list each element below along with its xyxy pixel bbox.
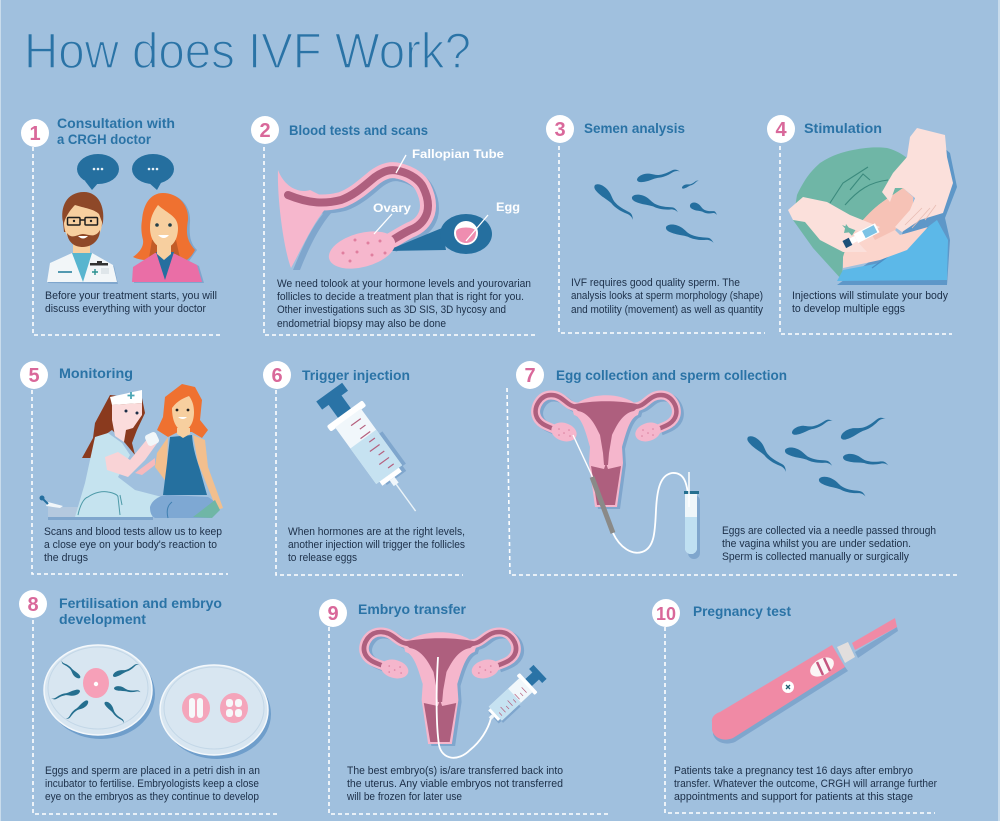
icon: hands injecting abdomen xyxy=(788,128,957,285)
icon: nurse and patient xyxy=(40,384,223,520)
text 5: a close eye on your body's reaction to xyxy=(44,539,217,551)
panel: step 9 embryo transfer xyxy=(319,599,609,814)
icon: doctor xyxy=(47,192,118,284)
heading 3: Semen analysis xyxy=(584,121,685,136)
text 6: to release eggs xyxy=(288,552,358,564)
label: ovary: Ovary xyxy=(373,201,411,215)
text 9: will be frozen for later use xyxy=(346,791,462,803)
badge 2: 2 xyxy=(259,120,271,142)
diagram: uterus with collection needle xyxy=(536,395,689,553)
heading 1: Consultation with xyxy=(57,116,175,131)
text 7: Eggs are collected via a needle passed through xyxy=(722,525,936,537)
panel: step 6 trigger injection xyxy=(263,361,466,575)
badge 10 xyxy=(652,599,680,627)
badge 6 xyxy=(263,361,291,389)
label: fallopian tube: Fallopian Tube xyxy=(412,147,504,161)
heading 9: Embryo transfer xyxy=(358,602,467,617)
panel: step 10 pregnancy test xyxy=(652,599,937,813)
panel: step 8 fertilisation xyxy=(19,590,277,814)
text 8: Eggs and sperm are placed in a petri dish in an xyxy=(45,765,260,777)
heading 10: Pregnancy test xyxy=(693,604,792,619)
badge 5 xyxy=(20,361,48,389)
heading 4: Stimulation xyxy=(804,121,882,136)
diagram: fallopian tube and ovary xyxy=(278,155,492,275)
text 4: Injections will stimulate your body xyxy=(792,290,949,302)
icon: pregnancy test stick xyxy=(712,618,898,744)
panel: step 3 semen analysis xyxy=(546,115,765,333)
icon: sperm group xyxy=(744,410,889,496)
text 1: Before your treatment starts, you will xyxy=(45,290,217,302)
text 3: and motility (movement) as well as quantity xyxy=(571,304,764,316)
badge 8: 8 xyxy=(27,594,39,616)
text 3: IVF requires good quality sperm. The xyxy=(571,277,740,289)
text 2: We need tolook at your hormone levels and yourovarian xyxy=(277,278,531,290)
badge 4: 4 xyxy=(775,119,787,141)
text 8: incubator to fertilise. Embryologists keep a close xyxy=(45,778,259,790)
text 9: The best embryo(s) is/are transferred back into xyxy=(347,765,563,777)
heading 2: Blood tests and scans xyxy=(289,123,428,138)
text 7: Sperm is collected manually or surgically xyxy=(722,551,910,563)
badge 10: 10 xyxy=(656,604,676,624)
icon: test tube xyxy=(684,472,700,559)
badge 4 xyxy=(767,115,795,143)
heading 8: development xyxy=(59,612,147,627)
icon: petri dish with egg and sperm xyxy=(44,645,155,739)
text 10: transfer. Whatever the outcome, CRGH will arrange further xyxy=(674,778,937,790)
heading 7: Egg collection and sperm collection xyxy=(556,368,787,383)
panel: step 5 monitoring xyxy=(20,361,228,574)
panel: step 4 stimulation xyxy=(767,115,957,334)
text 7: the vagina whilst you are under sedation. xyxy=(722,538,911,550)
title: How does IVF Work? xyxy=(24,23,471,79)
text 5: the drugs xyxy=(44,552,89,564)
text 3: analysis looks at sperm morphology (shape) xyxy=(571,290,763,302)
text 10: appointments and support for patients at this stage xyxy=(674,791,913,803)
badge 3: 3 xyxy=(554,119,566,141)
text 9: the uterus. Any viable embryos not transferred xyxy=(347,778,563,790)
text 4: to develop multiple eggs xyxy=(792,303,906,315)
panel: step 2 blood tests xyxy=(251,116,535,335)
icon: speech bubble doctor xyxy=(77,154,119,190)
badge 6: 6 xyxy=(271,365,283,387)
badge 7: 7 xyxy=(524,365,536,387)
heading 8: Fertilisation and embryo xyxy=(59,596,222,611)
badge 8 xyxy=(19,590,47,618)
icon: transfer syringe xyxy=(481,662,549,728)
badge 3 xyxy=(546,115,574,143)
text 2: Other investigations such as 3D SIS, 3D hycosy and xyxy=(277,304,506,316)
text 2: endometrial biopsy may also be done xyxy=(277,318,446,330)
text 6: another injection will trigger the follicles xyxy=(288,539,466,551)
text 2: follicles to decide a treatment plan that is right for you. xyxy=(277,291,524,303)
text 1: discuss everything with your doctor xyxy=(45,303,206,315)
badge 1 xyxy=(21,119,49,147)
badge 5: 5 xyxy=(28,365,40,387)
text 6: When hormones are at the right levels, xyxy=(288,526,465,538)
icon: petri dish with embryos xyxy=(160,665,271,759)
icon: woman patient xyxy=(132,193,204,283)
icon: speech bubble patient xyxy=(132,154,174,190)
badge 1: 1 xyxy=(29,123,41,145)
text 10: Patients take a pregnancy test 16 days after embryo xyxy=(674,765,913,777)
badge 2 xyxy=(251,116,279,144)
heading 1: a CRGH doctor xyxy=(57,132,152,147)
badge 7 xyxy=(516,361,544,389)
badge 9 xyxy=(319,599,347,627)
icon: syringe xyxy=(311,379,433,524)
text 5: Scans and blood tests allow us to keep xyxy=(44,526,222,538)
text 8: eye on the embryos as they continue to develop xyxy=(45,791,259,803)
heading 5: Monitoring xyxy=(59,366,133,381)
diagram: uterus with catheter xyxy=(364,632,519,758)
icon: sperm group xyxy=(591,162,718,243)
panel: step 7 egg and sperm collection xyxy=(507,361,960,575)
badge 9: 9 xyxy=(327,603,339,625)
heading 6: Trigger injection xyxy=(302,368,410,383)
label: egg: Egg xyxy=(496,200,520,214)
panel: step 1 consultation xyxy=(21,116,220,335)
